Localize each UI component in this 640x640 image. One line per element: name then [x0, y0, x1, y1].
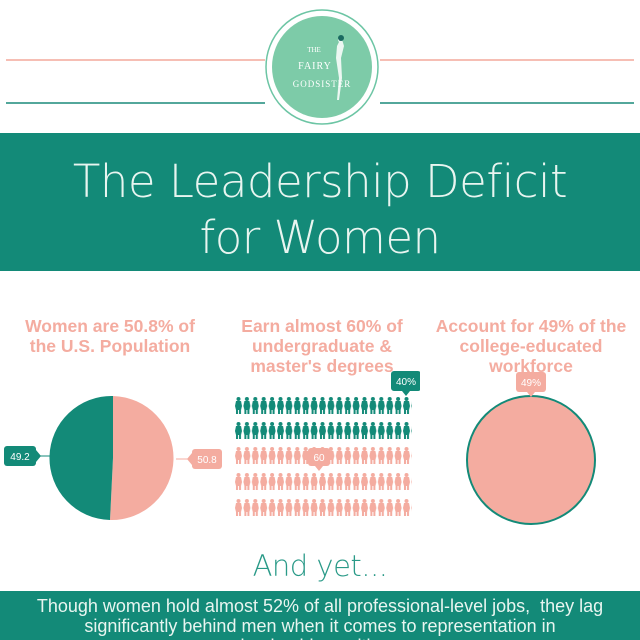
circle chart — [466, 372, 596, 525]
logo: FAIRY — [298, 61, 332, 72]
label 60 — [308, 448, 330, 471]
heading: degrees: Earn almost 60% of undergraduate & master's degrees — [241, 316, 403, 376]
bottom band text — [0, 591, 640, 640]
bottom band text: significantly behind men when it comes to representation in — [84, 616, 556, 636]
heading: workforce: Account for 49% of the college-educated workforce — [436, 316, 626, 376]
pie chart — [4, 396, 222, 520]
label 50.8 — [187, 449, 222, 469]
logo: GODSISTER — [293, 79, 351, 89]
title band: for Women — [199, 211, 441, 264]
decorative header lines and logo — [6, 9, 634, 125]
label 40%: 40% — [396, 377, 416, 388]
bottom band text: Though women hold almost 52% of all professional-level jobs, they lag — [37, 596, 603, 616]
label 49%: 49% — [521, 378, 541, 389]
logo: THE — [307, 46, 321, 54]
pictogram chart — [235, 371, 420, 516]
label 49.2 — [4, 446, 41, 466]
And yet heading: And yet... — [253, 549, 387, 583]
title band — [0, 133, 640, 271]
label 49.2: 49.2 — [10, 452, 30, 463]
label 50.8: 50.8 — [197, 455, 217, 466]
logo — [266, 10, 378, 124]
label 49% — [516, 372, 546, 397]
label 40% — [391, 371, 421, 396]
heading: population: Women are 50.8% of the U.S. Population — [25, 316, 195, 356]
label 60: 60 — [313, 453, 325, 464]
title band: The Leadership Deficit — [73, 155, 567, 208]
